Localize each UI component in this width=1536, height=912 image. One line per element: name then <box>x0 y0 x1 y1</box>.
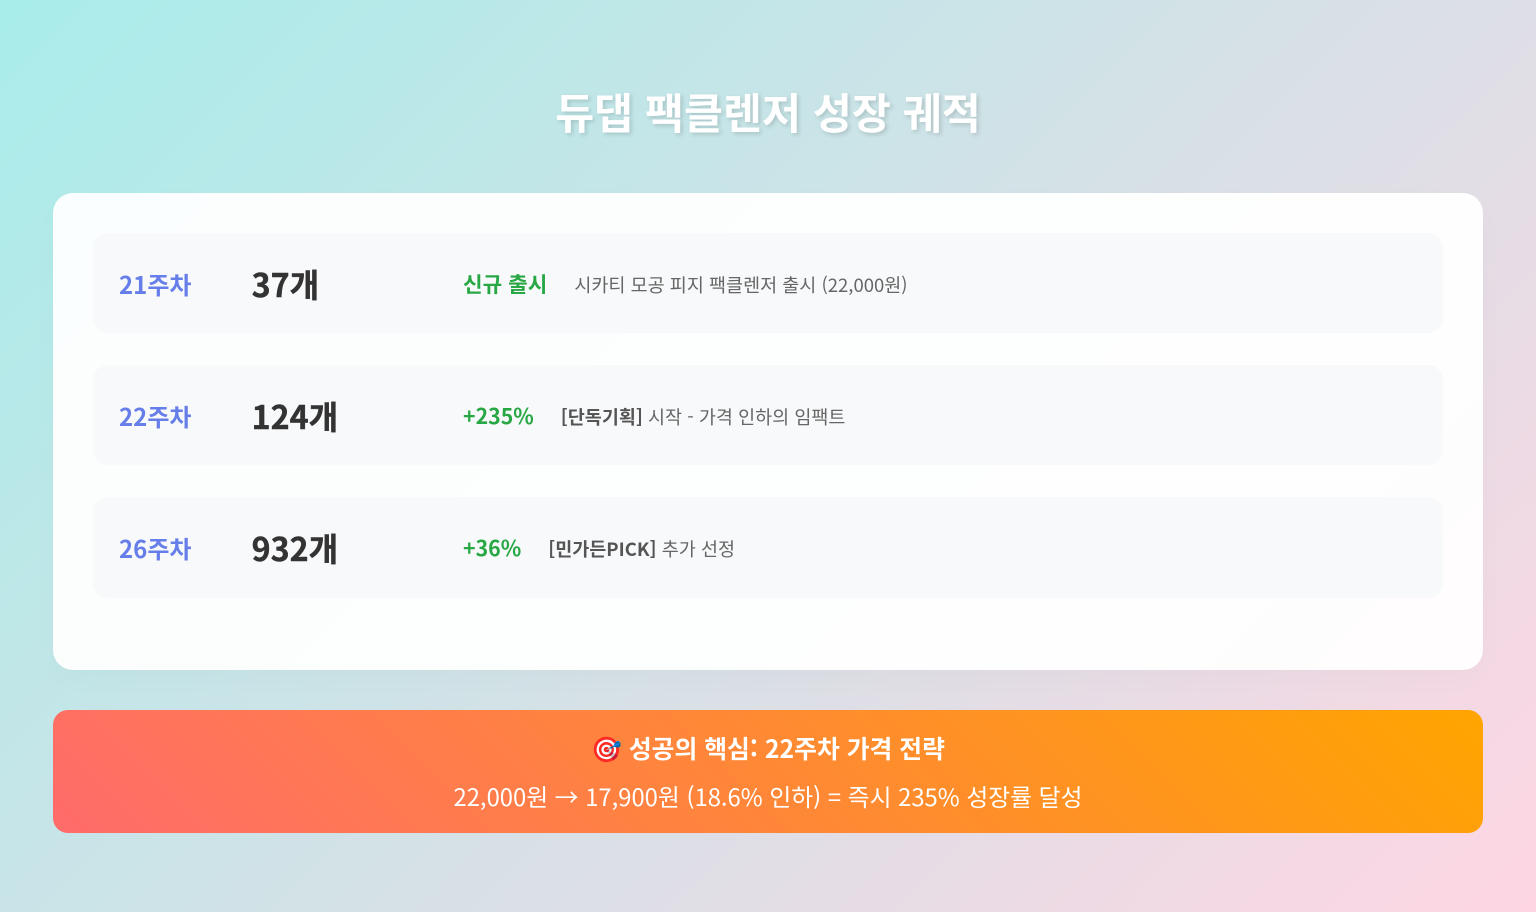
count: 37개 <box>252 261 319 307</box>
callout detail: 22,000원 → 17,900원 (18.6% 인하) = 즉시 235% 성장률 달성 <box>454 778 1082 813</box>
week label: 21주차 <box>119 266 191 301</box>
description: +235% [단독기획] 시작 - 가격 인하의 임팩트 <box>463 400 845 431</box>
title: 듀댑 팩클렌저 성장 궤적 <box>555 81 981 142</box>
panel: growth timeline <box>53 193 1483 670</box>
row: week 22 <box>93 365 1443 465</box>
week label: 26주차 <box>119 530 191 565</box>
description: +36% [민가든PICK] 추가 선정 <box>463 532 735 563</box>
row: week 21 <box>93 233 1443 333</box>
week label: 22주차 <box>119 398 191 433</box>
callout heading: 🎯 성공의 핵심: 22주차 가격 전략 <box>591 730 945 766</box>
count: 932개 <box>252 525 338 571</box>
count: 124개 <box>252 393 338 439</box>
callout: key to success <box>53 710 1483 833</box>
row: week 26 <box>93 497 1443 598</box>
description: 신규 출시 시카티 모공 피지 팩클렌저 출시 (22,000원) <box>463 268 908 299</box>
